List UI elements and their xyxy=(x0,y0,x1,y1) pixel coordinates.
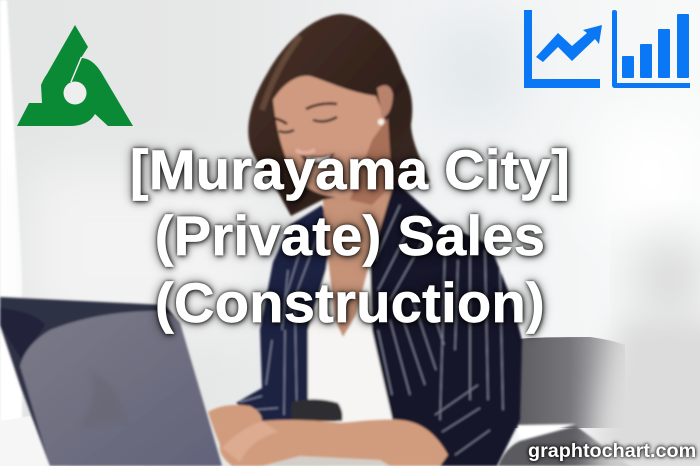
shirt xyxy=(292,250,393,422)
shadow side of neck xyxy=(350,118,392,205)
eyes, brows, nose and mouth xyxy=(273,104,337,124)
laptop xyxy=(0,297,222,466)
ear and earring xyxy=(377,85,393,118)
title xyxy=(124,138,575,340)
footer: site name: graphtochart.com xyxy=(528,440,696,462)
blurred right side of the room xyxy=(590,240,700,466)
hair highlight streak xyxy=(262,36,300,110)
hair xyxy=(248,14,430,216)
title: (Construction) xyxy=(155,271,545,334)
table xyxy=(0,416,70,466)
face xyxy=(273,76,386,197)
jacket right xyxy=(370,178,522,466)
title: (Private) Sales xyxy=(155,204,545,267)
jacket left xyxy=(236,205,332,422)
woman xyxy=(208,14,522,466)
title: [Murayama City] xyxy=(130,138,570,201)
forearm and hands xyxy=(208,405,448,466)
neck and chest xyxy=(322,150,392,337)
chair xyxy=(498,337,630,466)
cuff xyxy=(291,399,342,421)
pinstripes xyxy=(240,205,503,455)
